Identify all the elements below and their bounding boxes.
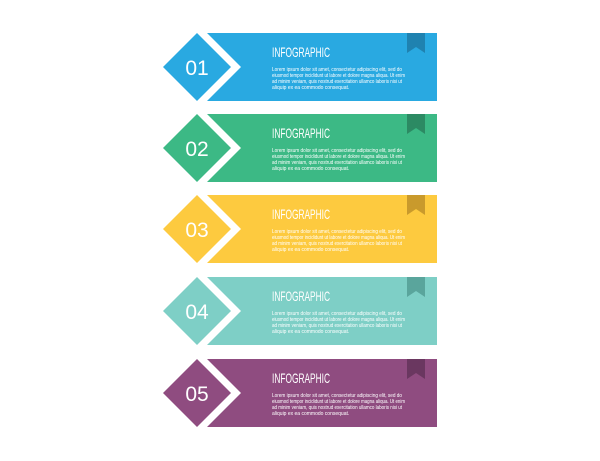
panel: step 01	[161, 27, 437, 107]
number: 04	[185, 301, 209, 324]
heading and text block	[272, 206, 405, 253]
icon: bookmark	[407, 277, 425, 297]
number: 02	[185, 138, 209, 161]
panel: step 03	[161, 189, 437, 269]
number: 05	[185, 383, 209, 406]
heading and text block	[272, 370, 405, 417]
panel: step 04	[161, 271, 437, 351]
heading and text block	[272, 125, 405, 172]
number: 03	[185, 219, 209, 242]
icon: bookmark	[407, 114, 425, 134]
heading and text block	[272, 44, 405, 91]
number: 01	[185, 57, 209, 80]
icon: bookmark	[407, 33, 425, 53]
icon: bookmark	[407, 359, 425, 379]
heading and text block	[272, 288, 405, 335]
icon: bookmark	[407, 195, 425, 215]
panel: step 05	[161, 353, 437, 433]
panel: step 02	[161, 108, 437, 188]
